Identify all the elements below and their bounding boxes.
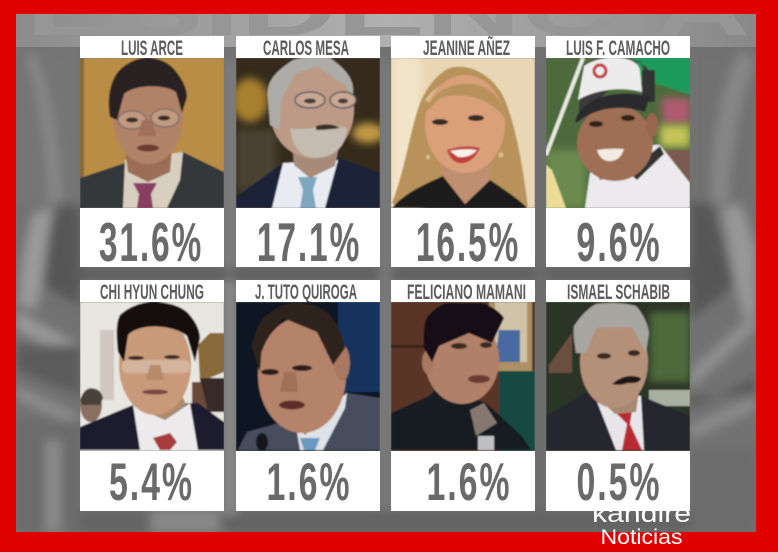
name: CARLOS MESA [263, 37, 349, 60]
percentage: 9.6% [576, 212, 662, 273]
card: Chi Hyun Chung [80, 280, 224, 512]
card: Feliciano Mamani [391, 280, 535, 512]
card: Ismael Schabib [546, 280, 690, 512]
portrait [391, 302, 535, 451]
percentage: 0.5% [577, 454, 661, 512]
name: FELICIANO MAMANI [407, 281, 526, 304]
name: CHI HYUN CHUNG [100, 281, 204, 304]
portrait [232, 57, 384, 208]
portrait [80, 58, 224, 208]
percentage: 16.5% [416, 211, 520, 273]
name: ISMAEL SCHABIB [567, 281, 670, 304]
card: J. Tuto Quiroga [236, 280, 380, 512]
watermark: kandire Noticias: kandire [592, 500, 691, 528]
percentage: 5.4% [109, 454, 194, 512]
portrait [546, 302, 690, 451]
name: LUIS ARCE [121, 37, 183, 60]
watermark: kandire Noticias: Noticias [600, 526, 682, 549]
card: Luis F. Camacho [546, 36, 690, 273]
percentage: 1.6% [267, 454, 351, 512]
percentage: 31.6% [99, 211, 203, 273]
card: Jeanine Añez [391, 36, 535, 273]
portrait [236, 302, 380, 451]
percentage: 1.6% [427, 454, 511, 512]
card: Carlos Mesa [232, 36, 384, 273]
card: Luis Arce [80, 36, 224, 273]
watermark: kandire Noticias [592, 500, 691, 549]
portrait [546, 57, 690, 208]
name: J. TUTO QUIROGA [255, 281, 357, 304]
portrait [80, 302, 224, 451]
portrait [391, 58, 535, 208]
percentage: 17.1% [257, 211, 361, 273]
name: LUIS F. CAMACHO [566, 37, 670, 60]
name: JEANINE AÑEZ [423, 37, 510, 60]
